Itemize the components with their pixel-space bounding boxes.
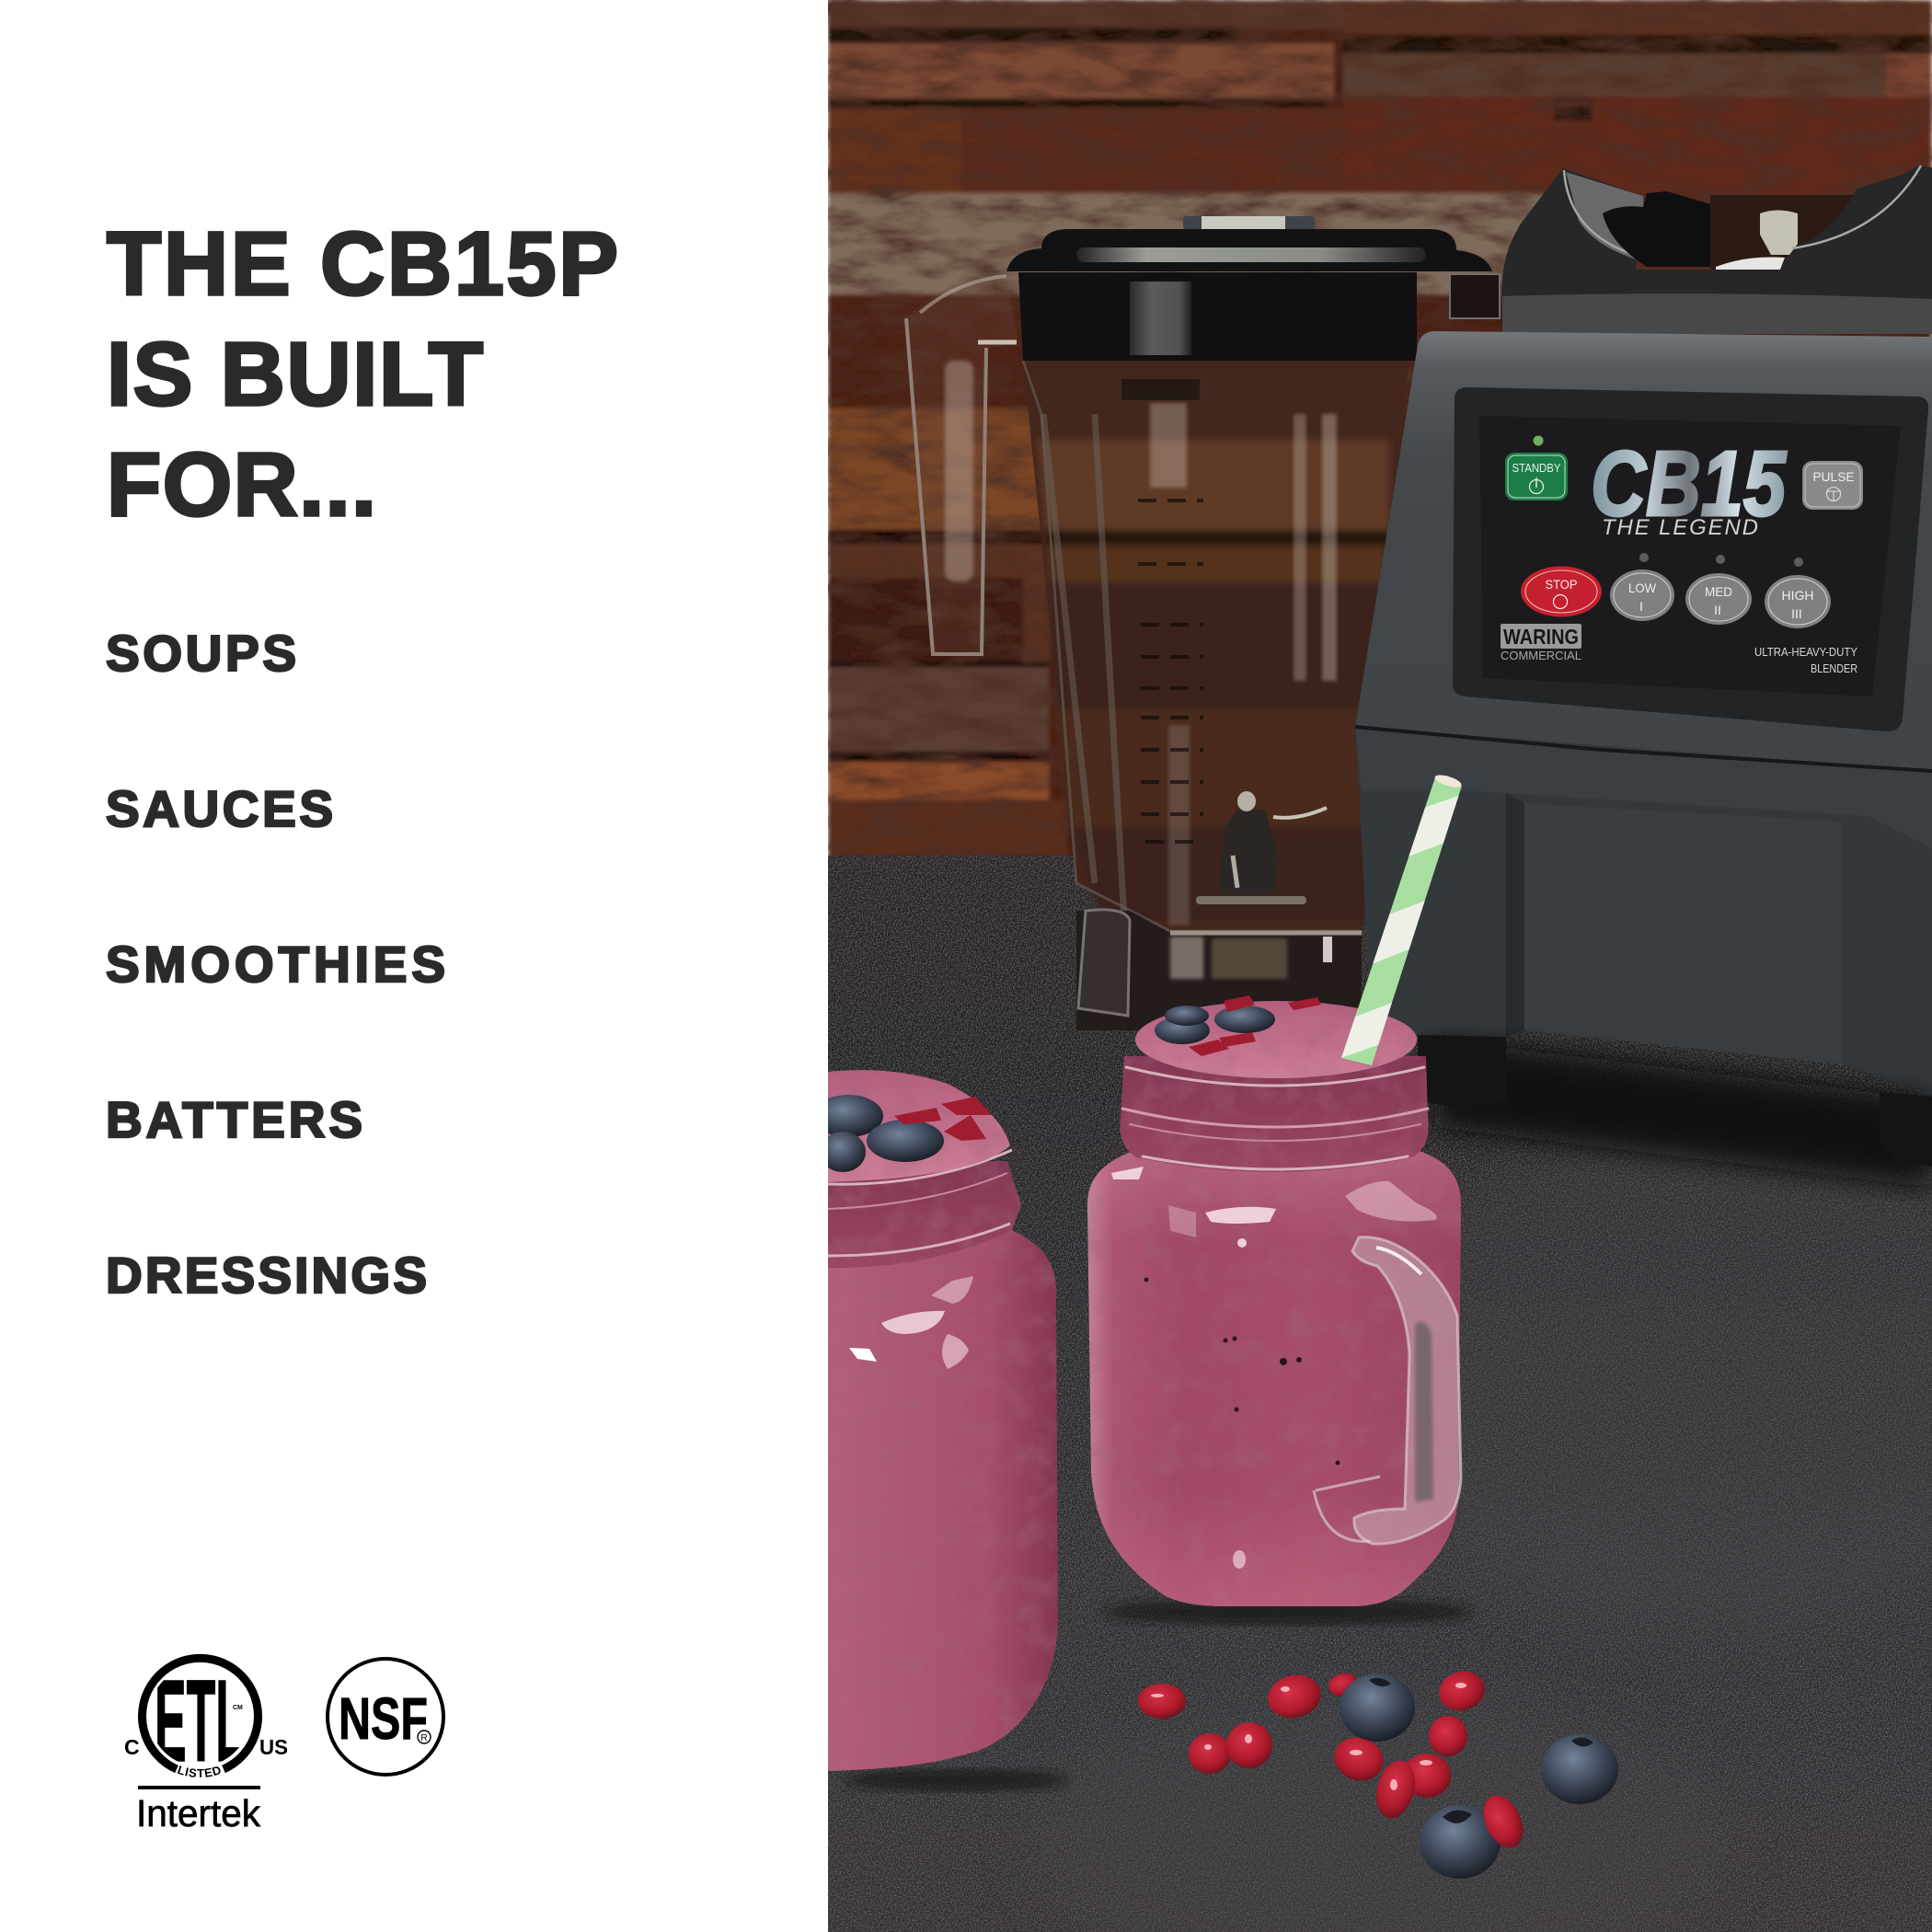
icon: ETL listed Intertek certification mark <box>124 1654 288 1834</box>
control panel bezel <box>1453 387 1928 731</box>
jar smoothie body <box>1087 1150 1461 1606</box>
pitcher handle <box>906 276 1018 654</box>
button: pulse: PULSE <box>1812 469 1855 484</box>
logo: CB15: CB15 <box>1591 432 1787 535</box>
heading: the CB15P is built for: FOR... <box>107 434 376 535</box>
left jar neck <box>828 1161 1021 1268</box>
button: med: II <box>1714 603 1721 617</box>
glass reflections <box>1111 1167 1437 1569</box>
striped paper straw <box>1325 773 1472 1072</box>
seed highlights <box>1151 1683 1466 1790</box>
icon: ETL listed Intertek certification mark: ETL <box>155 1656 245 1786</box>
left jar thread highlights <box>828 1150 1012 1256</box>
glass reflections left <box>849 1276 973 1369</box>
wood plank wall <box>828 0 1932 860</box>
jar: left smoothie mason jar <box>813 1070 1058 1771</box>
jar: front smoothie mason jar <box>1087 995 1461 1606</box>
list item: soups: SOUPS <box>106 625 296 682</box>
button: standby: STANDBY <box>1512 461 1561 475</box>
button: med: MED <box>1705 584 1732 599</box>
pitcher body <box>1023 361 1409 931</box>
icon: NSF certification mark: R <box>420 1733 428 1743</box>
button: high: HIGH <box>1781 588 1814 603</box>
scattered pomegranate seeds <box>1138 1666 1489 1823</box>
toppings: blueberries and seeds <box>1155 995 1321 1056</box>
jar rim and thread highlights <box>1122 1067 1428 1169</box>
shadow under jars <box>846 1599 1472 1791</box>
scattered blueberries <box>1340 1673 1618 1879</box>
button: stop: STOP <box>1546 577 1577 592</box>
icon: ETL listed Intertek certification mark: LISTED <box>177 1765 221 1777</box>
pitcher base <box>1076 910 1362 1030</box>
button: standby <box>1505 453 1568 500</box>
pomegranate seed beside blueberry <box>1476 1789 1531 1854</box>
logo: Waring Commercial <box>1501 624 1581 662</box>
button: med <box>1685 573 1752 625</box>
list of uses <box>106 625 445 1304</box>
icon: ETL listed Intertek certification mark: C <box>124 1735 140 1759</box>
tagline: the legend: THE LEGEND <box>1602 515 1758 540</box>
button: stop <box>1521 567 1602 616</box>
button: high <box>1765 575 1831 628</box>
button: low: LOW <box>1628 581 1657 595</box>
smoothie top surface <box>1135 1001 1417 1078</box>
pitcher lid <box>1006 216 1500 361</box>
icon: ETL listed Intertek certification mark: Intertek <box>136 1792 260 1834</box>
heading: the CB15P is built for: IS BUILT <box>107 324 483 424</box>
icon: NSF certification mark <box>328 1659 443 1775</box>
icon: ETL listed Intertek certification mark: US <box>259 1735 288 1759</box>
list item: batters: BATTERS <box>106 1091 362 1148</box>
logo: Waring Commercial: WARING <box>1503 625 1579 649</box>
dark counter top <box>828 856 1932 1932</box>
jar neck <box>1120 1056 1429 1172</box>
list item: smoothies: SMOOTHIES <box>106 936 445 993</box>
list item: dressings: DRESSINGS <box>106 1247 427 1304</box>
button: high: III <box>1791 606 1802 621</box>
blender pitcher <box>906 216 1500 1030</box>
blender lower body <box>1355 727 1932 1095</box>
blender body <box>1355 331 1932 771</box>
left jar toppings <box>813 1095 992 1172</box>
measurement markings <box>1121 379 1203 842</box>
logo: Waring Commercial: COMMERCIAL <box>1501 649 1581 662</box>
heading: the CB15P is built for <box>107 213 618 535</box>
panel: white text column <box>0 0 828 1932</box>
button: low: I <box>1639 599 1643 614</box>
heading: the CB15P is built for: THE CB15P <box>107 213 618 314</box>
button: pulse <box>1802 461 1863 510</box>
control panel face <box>1479 416 1901 696</box>
label: ultra-heavy-duty blender: BLENDER <box>1811 661 1857 675</box>
jar glass handle <box>1314 1237 1461 1544</box>
icon: ETL listed Intertek certification mark: CM <box>233 1705 243 1711</box>
pitcher blades <box>1196 791 1327 904</box>
jar shading <box>1087 1150 1461 1606</box>
label: ultra-heavy-duty blender: ULTRA-HEAVY-DUTY <box>1754 645 1857 659</box>
blender feet and shadow <box>1418 1035 1932 1187</box>
blender base unit <box>1355 166 1932 1187</box>
dark berry specks <box>1144 1277 1340 1465</box>
icon: NSF certification mark: NSF <box>339 1685 428 1752</box>
button: low <box>1610 569 1674 621</box>
indicator lights <box>1533 436 1803 567</box>
list item: sauces: SAUCES <box>106 780 333 837</box>
photo: blender with smoothies on a dark counter <box>813 0 1932 1932</box>
left smoothie top surface <box>828 1070 1010 1182</box>
label: ultra-heavy-duty blender <box>1754 645 1857 675</box>
blender motor collar <box>1502 166 1932 334</box>
left jar body <box>828 1228 1058 1771</box>
